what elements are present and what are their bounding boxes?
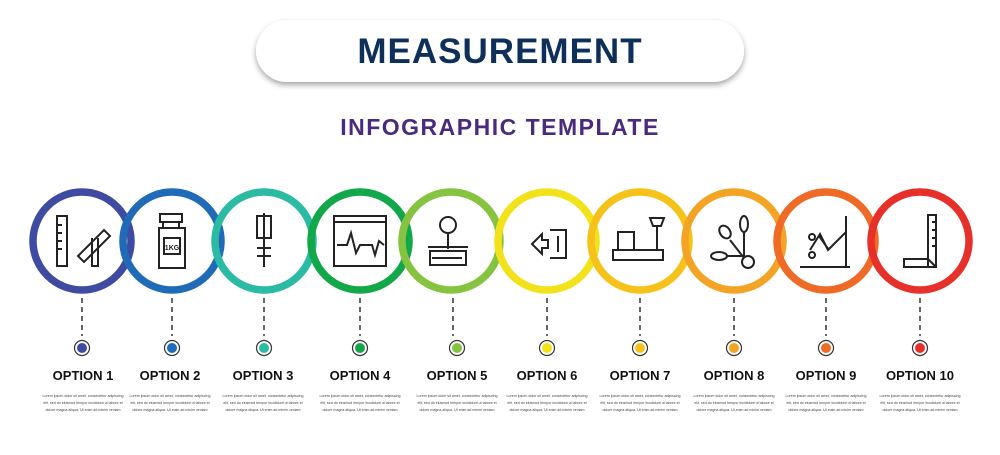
description texts: elit, sed do eiusmod tempor incididunt ut labore et [694, 401, 774, 405]
description texts: Lorem ipsum dolor sit amet, consectetur adipiscing [694, 394, 774, 398]
option labels [53, 368, 954, 383]
subtitle: INFOGRAPHIC TEMPLATE [340, 114, 660, 140]
option labels: OPTION 1 [53, 368, 113, 383]
icon: measuring spoons [711, 216, 754, 268]
description texts [43, 394, 960, 412]
description texts: elit, sed do eiusmod tempor incididunt ut labore et [786, 401, 866, 405]
option labels: OPTION 5 [427, 368, 487, 383]
description texts: elit, sed do eiusmod tempor incididunt ut labore et [223, 401, 303, 405]
description texts: Lorem ipsum dolor sit amet, consectetur adipiscing [786, 394, 866, 398]
icons [57, 213, 936, 268]
description texts: elit, sed do eiusmod tempor incididunt ut labore et [600, 401, 680, 405]
option labels: OPTION 8 [704, 368, 764, 383]
description texts: dolore magna aliqua. Ut enim ad minim veniam [696, 408, 772, 412]
description texts: dolore magna aliqua. Ut enim ad minim veniam [322, 408, 398, 412]
description texts: dolore magna aliqua. Ut enim ad minim veniam [419, 408, 495, 412]
description texts: dolore magna aliqua. Ut enim ad minim veniam [225, 408, 301, 412]
option labels: OPTION 9 [796, 368, 856, 383]
icon: chart [800, 216, 850, 267]
description texts: Lorem ipsum dolor sit amet, consectetur adipiscing [417, 394, 497, 398]
ring chain [33, 192, 969, 290]
icon: arrow area [532, 230, 566, 258]
description texts: Lorem ipsum dolor sit amet, consectetur adipiscing [130, 394, 210, 398]
description texts: Lorem ipsum dolor sit amet, consectetur adipiscing [600, 394, 680, 398]
description texts: Lorem ipsum dolor sit amet, consectetur adipiscing [507, 394, 587, 398]
icon: ruler set [57, 216, 110, 266]
description texts: Lorem ipsum dolor sit amet, consectetur adipiscing [880, 394, 960, 398]
icon: 1kg weight: 1KG [165, 245, 180, 252]
icon: luggage scale [613, 218, 664, 260]
description texts: elit, sed do eiusmod tempor incididunt ut labore et [507, 401, 587, 405]
option labels: OPTION 7 [610, 368, 670, 383]
description texts: dolore magna aliqua. Ut enim ad minim veniam [602, 408, 678, 412]
description texts: elit, sed do eiusmod tempor incididunt ut labore et [320, 401, 400, 405]
option labels: OPTION 10 [886, 368, 954, 383]
description texts: Lorem ipsum dolor sit amet, consectetur adipiscing [43, 394, 123, 398]
icon: carpenter square [904, 215, 936, 267]
title pill [256, 20, 744, 82]
icon: monitor wave [334, 216, 386, 266]
description texts: Lorem ipsum dolor sit amet, consectetur adipiscing [320, 394, 400, 398]
description texts: elit, sed do eiusmod tempor incididunt ut labore et [417, 401, 497, 405]
description texts: elit, sed do eiusmod tempor incididunt ut labore et [880, 401, 960, 405]
description texts: dolore magna aliqua. Ut enim ad minim veniam [882, 408, 958, 412]
description texts: elit, sed do eiusmod tempor incididunt ut labore et [43, 401, 123, 405]
option labels: OPTION 6 [517, 368, 577, 383]
option labels: OPTION 2 [140, 368, 200, 383]
option labels: OPTION 3 [233, 368, 293, 383]
description texts: elit, sed do eiusmod tempor incididunt ut labore et [130, 401, 210, 405]
connectors [82, 298, 920, 336]
dots [74, 340, 928, 356]
description texts: dolore magna aliqua. Ut enim ad minim veniam [132, 408, 208, 412]
option labels: OPTION 4 [330, 368, 391, 383]
title pill: MEASUREMENT [357, 32, 643, 71]
description texts: dolore magna aliqua. Ut enim ad minim veniam [788, 408, 864, 412]
icon: scale [428, 217, 468, 265]
description texts: Lorem ipsum dolor sit amet, consectetur adipiscing [223, 394, 303, 398]
description texts: dolore magna aliqua. Ut enim ad minim veniam [509, 408, 585, 412]
icon: caliper [257, 213, 271, 267]
description texts: dolore magna aliqua. Ut enim ad minim veniam [45, 408, 121, 412]
icon: 1kg weight [159, 214, 185, 268]
